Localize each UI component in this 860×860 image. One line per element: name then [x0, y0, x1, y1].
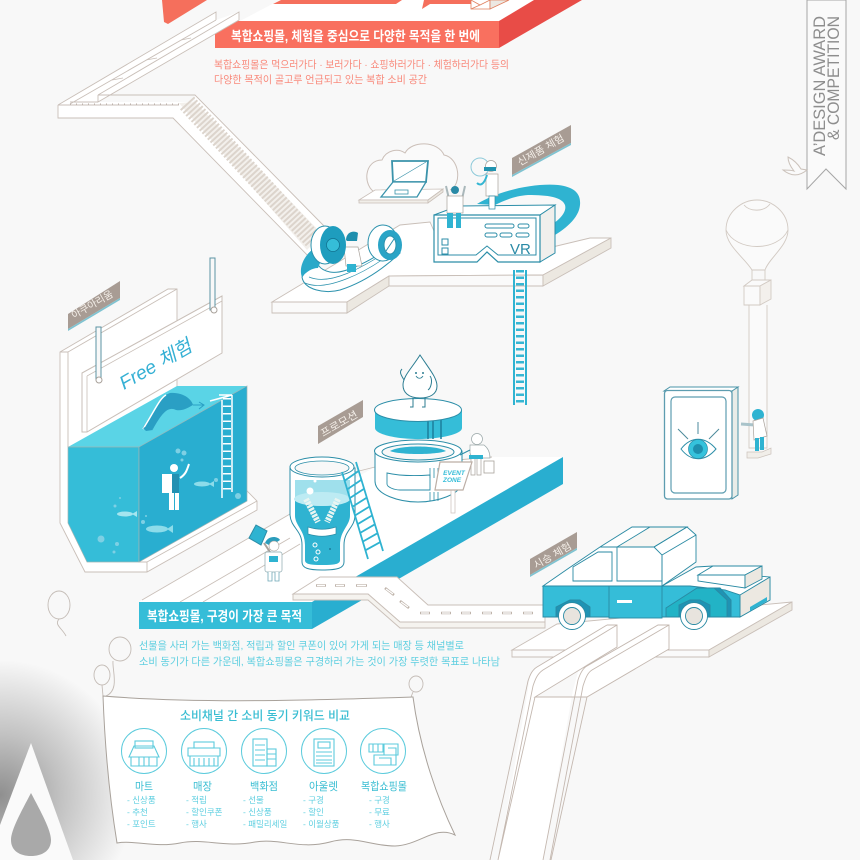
channel: outlet: - 할인 — [303, 807, 324, 817]
channel: complex mall: - 무료 — [369, 807, 390, 817]
channel: outlet — [302, 728, 346, 829]
award text: & COMPETITION — [825, 16, 843, 140]
person with headset and ring — [471, 158, 498, 209]
diver — [162, 464, 189, 510]
channel: complex mall: - 행사 — [369, 819, 390, 829]
right ear cup — [368, 225, 402, 261]
channel: department store: - 신상품 — [243, 807, 272, 817]
event zone text — [442, 470, 466, 484]
event cylinder lid — [374, 398, 462, 439]
promotion platform — [139, 457, 563, 629]
person holding bottle — [249, 525, 282, 581]
banner title: 소비채널 간 소비 동기 키워드 비교 — [180, 709, 350, 723]
fish and bubbles — [98, 448, 241, 554]
sign hanger left — [96, 327, 102, 383]
award text — [811, 16, 843, 156]
person — [344, 232, 362, 272]
channel: department store: 백화점 — [250, 780, 278, 793]
sign hanger right — [210, 258, 217, 313]
tilted ladder — [342, 462, 383, 559]
teal heading banner — [139, 602, 312, 629]
shelf — [359, 189, 443, 203]
dove — [783, 157, 807, 175]
coral description text: 다양한 목적이 골고루 언급되고 있는 복합 소비 공간 — [214, 74, 427, 86]
coral description text — [214, 58, 509, 86]
heading text: 복합쇼핑몰, 체험을 중심으로 다양한 목적을 한 번에 — [231, 29, 480, 44]
person with shopping bag — [460, 434, 494, 475]
event cylinder base — [374, 440, 462, 502]
logo: A mark — [0, 743, 73, 860]
channel: department store: - 선물 — [243, 795, 264, 805]
logo background gradient — [0, 655, 140, 860]
lamp balloon post — [726, 200, 788, 448]
ribbon badge — [807, 0, 846, 189]
channel: complex mall: 복합쇼핑몰 — [361, 780, 407, 793]
road — [293, 577, 545, 628]
balloons — [48, 591, 423, 697]
car platform — [512, 602, 792, 657]
eye icon — [678, 422, 719, 459]
sign text: Free 체험 — [116, 335, 198, 394]
cloud with laptop — [359, 144, 458, 203]
channel: store: - 행사 — [186, 819, 207, 829]
channel: outlet: - 이월상품 — [303, 819, 340, 829]
teal description text: 소비 동기가 다른 가운데, 복합쇼핑몰은 구경하러 가는 것이 가장 뚜렷한 목표로 나타남 — [139, 655, 500, 668]
teal description text — [139, 639, 500, 668]
VR ladder — [514, 270, 526, 405]
channel: mart: - 포인트 — [127, 819, 156, 829]
teal description text: 선물을 사러 가는 백화점, 적립과 할인 쿠폰이 있어 가게 되는 매장 등 채널별로 — [139, 639, 464, 652]
channel: store: - 할인쿠폰 — [186, 807, 223, 817]
aquarium label: 아쿠아리움 — [70, 288, 115, 322]
coral description text: 복합쇼핑몰은 먹으러가다 · 보러가다 · 쇼핑하러가다 · 체험하러가다 등의 — [214, 58, 509, 71]
channel: department store: - 패밀리세일 — [243, 819, 287, 829]
event zone text: ZONE — [442, 477, 462, 484]
tank front face — [68, 447, 139, 562]
keyword banner — [103, 696, 455, 846]
headphones with person — [301, 225, 402, 291]
eye kiosk — [664, 387, 738, 499]
channel: outlet: - 구경 — [303, 795, 324, 805]
channel: store — [182, 728, 226, 829]
channel: mart: 마트 — [135, 780, 153, 793]
promotion label: 프로모션 — [318, 409, 360, 440]
aquarium wall — [60, 289, 257, 572]
tank right face — [139, 386, 247, 562]
laptop — [381, 161, 428, 197]
water glass — [290, 457, 355, 570]
channel: department store — [242, 728, 287, 829]
new product label: 신제품 체험 — [516, 132, 567, 169]
test drive label — [530, 532, 577, 577]
ribbon — [308, 527, 336, 536]
heading banner — [215, 21, 499, 48]
top platform and coral banner — [162, 0, 582, 48]
wheat — [306, 499, 338, 522]
channel: mart — [122, 728, 166, 829]
channel: complex mall — [360, 728, 407, 829]
aquarium — [60, 258, 257, 572]
VR label: VR — [510, 241, 531, 258]
dolphin — [143, 393, 204, 431]
coral book fragment — [162, 0, 207, 24]
car — [543, 527, 770, 630]
VR platform — [272, 222, 611, 313]
channel: store: - 적립 — [186, 795, 207, 805]
person standing on headset, arms up — [446, 186, 465, 228]
teal heading text: 복합쇼핑몰, 구경이 가장 큰 목적 — [147, 609, 302, 624]
VR headset — [434, 185, 580, 262]
staircase — [58, 12, 325, 262]
channel: mart: - 추천 — [127, 807, 148, 817]
cloth — [103, 696, 455, 846]
channel: store: 매장 — [193, 780, 212, 793]
test drive label: 시승 체험 — [532, 540, 574, 572]
coral tile fragment — [273, 0, 402, 4]
channel: outlet: 아울렛 — [309, 780, 338, 793]
strap — [477, 185, 580, 239]
coral speech fragment — [422, 0, 471, 9]
new product label — [512, 125, 571, 177]
wheels — [558, 602, 708, 630]
award text: A’DESIGN AWARD — [811, 16, 829, 156]
promotion label — [318, 400, 363, 444]
aquarium label — [68, 281, 120, 331]
event zone text: EVENT — [443, 470, 466, 477]
event zone sign — [435, 462, 472, 513]
person at kiosk — [741, 409, 771, 458]
channel: complex mall: - 구경 — [369, 795, 390, 805]
sign board — [82, 258, 222, 432]
tank top — [68, 386, 247, 447]
channel: mart: - 신상품 — [127, 795, 156, 805]
tank ladder — [210, 395, 232, 498]
envelope box — [471, 0, 509, 9]
ramp supports — [490, 625, 669, 860]
left ear cup — [311, 226, 346, 264]
droplet character — [401, 355, 437, 407]
